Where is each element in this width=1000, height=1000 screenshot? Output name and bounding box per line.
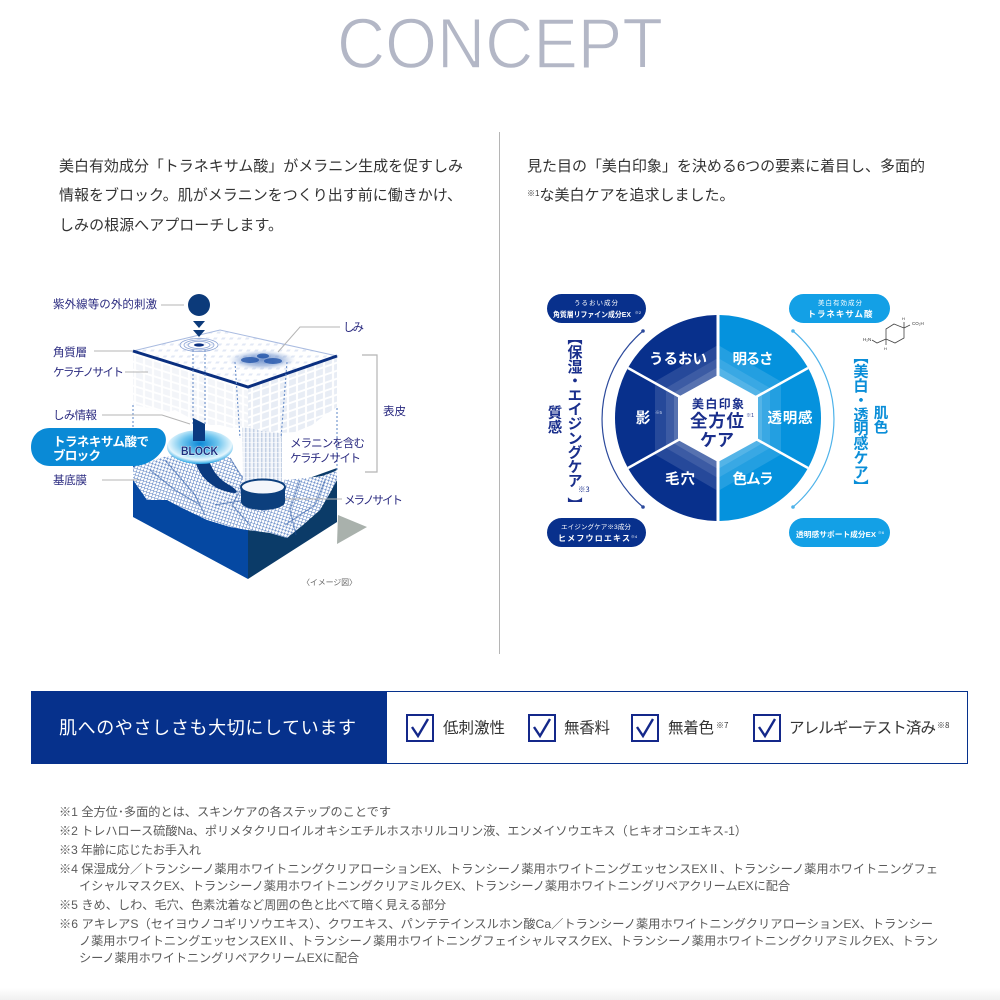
left intro text — [59, 158, 463, 234]
check: colorant free — [632, 715, 729, 741]
melanin stream — [242, 427, 282, 486]
left intro text: 情報をブロック。肌がメラニンをつくり出す前に働きかけ、 — [59, 186, 462, 204]
diagram labels: ケラチノサイト — [290, 452, 361, 465]
pill: tranexamic acid: トラネキサム酸 — [808, 309, 873, 319]
diagram labels: 〈イメージ図〉 — [302, 578, 357, 587]
diagram labels: 表皮 — [383, 405, 406, 418]
left half disc — [615, 315, 716, 521]
check: colorant free: ※7 — [716, 720, 729, 731]
segment labels: うるおい — [649, 351, 707, 368]
diagram labels: メラニンを含む — [290, 437, 365, 450]
divider spokes — [628, 368, 808, 468]
segment labels: 色ムラ — [732, 470, 774, 488]
right intro text — [527, 157, 925, 204]
center hexagon — [678, 375, 758, 462]
footnotes — [59, 804, 938, 965]
keratinocyte right face — [248, 356, 337, 433]
left intro text: 美白有効成分「トラネキサム酸」がメラニン生成を促すしみ — [59, 158, 463, 175]
pill: transparency ingredient: ※6 — [878, 530, 885, 535]
molecule structure — [863, 316, 924, 351]
left intro text: しみの根源へアプローチします。 — [59, 217, 283, 234]
pill: tranexamic acid — [789, 294, 890, 323]
melanin tail — [195, 460, 237, 493]
diagram labels: メラノサイト — [344, 494, 403, 507]
block torus — [167, 430, 233, 464]
molecule structure: H — [884, 346, 887, 351]
check: fragrance free: 無香料 — [564, 716, 610, 738]
molecule structure: CO₂H — [912, 321, 924, 326]
check: low irritation — [407, 715, 505, 741]
center label: 美白印象 — [692, 396, 744, 411]
pill: moisture ingredient: うるおい成分 — [574, 298, 618, 307]
segment labels: 影 — [636, 409, 651, 427]
front navy edges — [133, 351, 337, 387]
segment labels: 明るさ — [732, 351, 774, 368]
diagram labels: しみ — [343, 321, 364, 334]
vertical heading left: 【保湿・エイジングケア — [564, 330, 586, 488]
center label: 全方位 — [690, 411, 744, 431]
basement membrane mesh — [133, 455, 337, 538]
diagram labels — [53, 297, 406, 587]
footnotes: ノ薬用ホワイトニングエッセンスEXⅡ、トランシーノ薬用ホワイトニングフェイシャルマスクEX、トランシーノ薬用ホワイトニングクリアミルクEX、トラン — [79, 934, 938, 948]
ground shadow — [337, 515, 367, 544]
dotted guide lines — [133, 350, 337, 470]
leader lines — [94, 305, 342, 499]
diagram labels: しみ情報 — [53, 409, 98, 422]
pill: moisture ingredient: ※2 — [635, 310, 642, 315]
footnotes: ※4 保湿成分／トランシーノ薬用ホワイトニングクリアローションEX、トランシーノ薬用ホワイトニングエッセンスEXⅡ、トランシーノ薬用ホワイトニングフェ — [59, 861, 938, 876]
box base left face — [133, 465, 248, 579]
pill: transparency ingredient: 透明感サポート成分EX — [796, 529, 876, 539]
pill: tranexamic acid block: トラネキサム酸で — [53, 431, 149, 450]
check: low irritation: 低刺激性 — [443, 716, 505, 738]
check: allergy tested — [754, 715, 950, 741]
pill: aging ingredient — [547, 518, 646, 547]
title: CONCEPT — [337, 5, 663, 84]
stain blot — [228, 350, 296, 370]
pill: transparency ingredient — [789, 518, 890, 547]
vertical heading 肌色: 肌色 — [870, 405, 892, 434]
segment labels: 毛穴 — [665, 471, 696, 488]
right intro text: 見た目の「美白印象」を決める6つの要素に着目し、多面的 — [527, 157, 925, 175]
footnotes: ※5 きめ、しわ、毛穴、色素沈着など周囲の色と比べて暗く見える部分 — [59, 897, 446, 912]
mesh ridges — [150, 458, 325, 535]
pill: aging ingredient: ※4 — [631, 534, 638, 539]
check: allergy tested: アレルギーテスト済み — [789, 716, 936, 738]
block torus: BLOCK — [181, 444, 218, 458]
right intro text: ※1 — [527, 189, 540, 198]
gentle care band — [31, 691, 968, 764]
ripple mark — [180, 338, 218, 352]
pill: tranexamic acid: 美白有効成分 — [818, 298, 862, 307]
diagram labels: 角質層 — [53, 345, 87, 359]
pill: tranexamic acid block: ブロック — [53, 445, 101, 464]
pill: moisture ingredient — [547, 294, 646, 323]
molecule structure: H — [902, 316, 905, 321]
molecule structure: H₂N — [863, 337, 871, 342]
right half disc — [720, 315, 821, 521]
footnotes: シーノ薬用ホワイトニングリペアクリームEXに配合 — [79, 951, 359, 965]
melanocyte cylinder — [241, 480, 285, 510]
keratinocyte left face — [133, 351, 248, 428]
right intro text: な美白ケアを追求しました。 — [539, 187, 734, 204]
check: fragrance free — [529, 715, 610, 741]
band frame — [32, 692, 968, 764]
vertical heading left close bracket: 】 — [564, 496, 586, 512]
band heading: 肌へのやさしさも大切にしています — [59, 714, 356, 740]
skin structure diagram — [31, 294, 406, 587]
footnotes: ※2 トレハロース硫酸Na、ポリメタクリロイルオキシエチルホスホリルコリン液、エンメイソウエキス（ヒキオコシエキス-1） — [59, 823, 747, 838]
footnotes: ※1 全方位･多面的とは、スキンケアの各ステップのことです — [59, 804, 391, 819]
center label: ※1 — [746, 413, 754, 419]
top stratum surface — [133, 330, 337, 387]
check: allergy tested: ※8 — [937, 720, 950, 731]
vertical heading right: 【美白・透明感ケア】 — [850, 349, 872, 493]
pill: aging ingredient: エイジングケア※3成分 — [561, 522, 631, 531]
page bottom shade — [0, 988, 1000, 1000]
check: colorant free: 無着色 — [668, 716, 714, 738]
epidermis bracket — [362, 355, 377, 472]
note mark 3: ※3 — [578, 484, 590, 495]
pill: moisture ingredient: 角質層リファイン成分EX — [553, 309, 631, 319]
box base right face — [248, 468, 337, 579]
diagram labels: 紫外線等の外的刺激 — [53, 297, 158, 311]
footnotes: イシャルマスクEX、トランシーノ薬用ホワイトニングクリアミルクEX、トランシーノ薬用ホワイトニングリペアクリームEXに配合 — [79, 879, 790, 893]
pill: tranexamic acid block — [31, 428, 166, 466]
arcs — [602, 331, 834, 507]
footnotes: ※3 年齢に応じたお手入れ — [59, 843, 201, 857]
vertical heading 質感: 質感 — [544, 405, 566, 434]
segment labels: ※5 — [655, 410, 662, 415]
segment labels: 透明感 — [768, 409, 813, 427]
six elements wheel — [544, 294, 924, 547]
diagram labels: 基底膜 — [53, 474, 87, 487]
center label — [690, 396, 754, 450]
UV circle — [188, 294, 210, 316]
stain signal column — [193, 418, 205, 441]
segment labels — [636, 351, 813, 488]
footnotes: ※6 アキレアS（セイヨウノコギリソウエキス）、クワエキス、パンテテインスルホン酸Ca／トランシーノ薬用ホワイトニングクリアローションEX、トランシー — [59, 916, 933, 931]
center divider — [499, 132, 500, 654]
down triangles — [193, 321, 205, 337]
diagram labels: ケラチノサイト — [53, 366, 124, 379]
center label: ケア — [700, 431, 734, 450]
band heading — [31, 691, 387, 764]
pill: aging ingredient: ヒメフウロエキス — [558, 534, 630, 543]
